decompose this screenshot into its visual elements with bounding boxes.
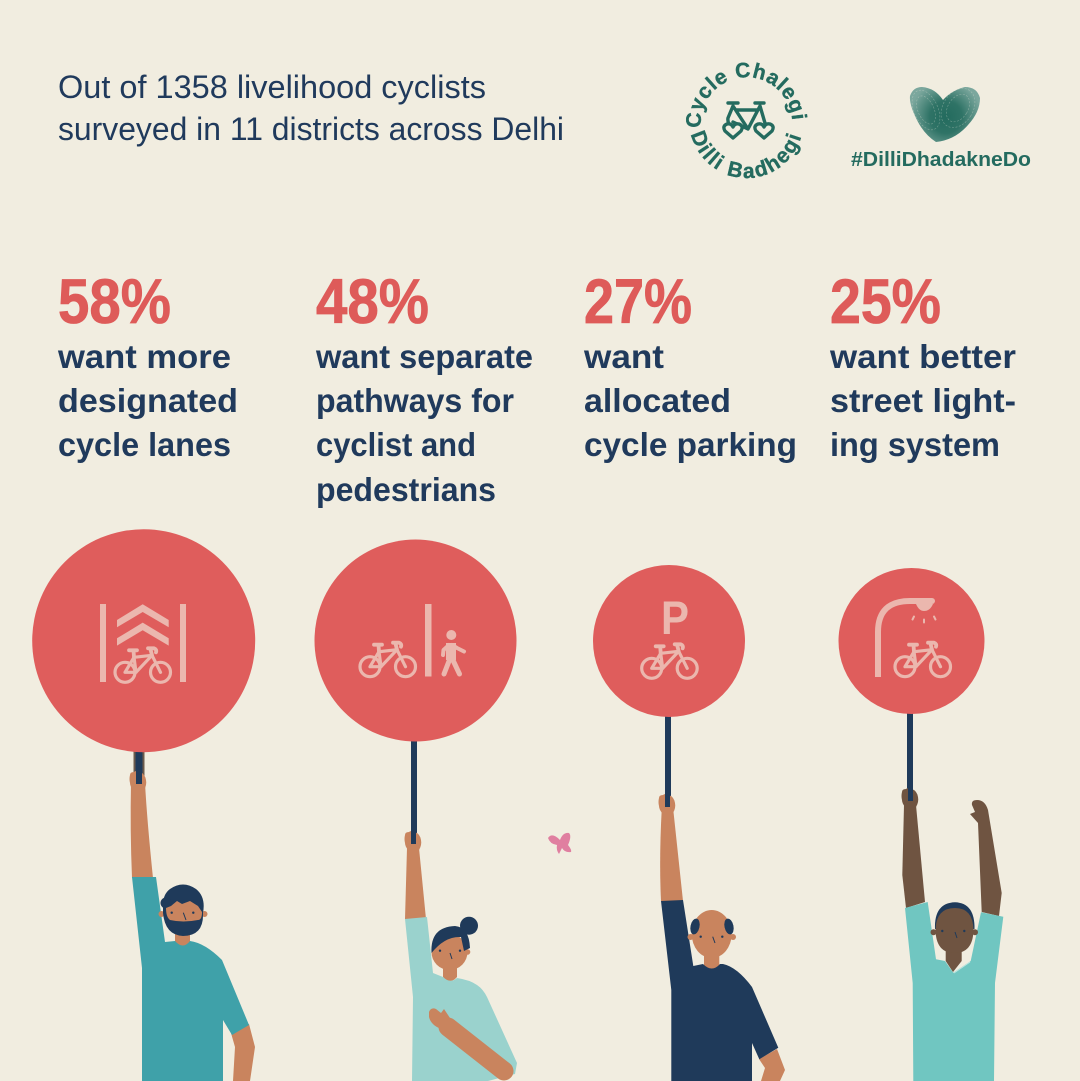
stat: 48% <box>315 267 533 508</box>
stat: 25%: want better <box>829 338 1016 375</box>
person: man with beard <box>130 770 255 1081</box>
lower arm <box>231 1024 255 1081</box>
person: bald man <box>658 793 785 1081</box>
icon: cycle lane with chevrons <box>100 604 186 682</box>
raised free arm <box>970 800 1002 916</box>
stat: 58% <box>57 267 238 463</box>
person: woman with bun <box>404 830 517 1081</box>
stat: 27% <box>583 267 797 463</box>
stat: 27%: want <box>583 338 664 375</box>
raised arm <box>405 848 426 919</box>
hair and beard <box>163 884 204 936</box>
heading: survey intro: Out of 1358 livelihood cyclists <box>58 69 486 105</box>
face <box>166 901 202 922</box>
stat: 48%: pathways for <box>316 382 514 419</box>
neck <box>443 965 457 981</box>
stat: 25%: 25% <box>830 267 941 337</box>
stat: 27%: allocated <box>584 382 731 419</box>
lowered arm <box>429 1008 504 1071</box>
hashtag: #DilliDhadakneDo <box>851 149 1031 171</box>
stat: 27%: 27% <box>584 267 692 337</box>
stat: 58%: designated <box>58 382 238 419</box>
head <box>936 908 974 953</box>
shirt <box>405 917 517 1081</box>
raised arm with pole <box>902 805 925 908</box>
hair with bun <box>431 926 470 953</box>
stat: 48%: pedestrians <box>316 471 496 508</box>
neck <box>946 948 962 972</box>
icon: parking P with bicycle <box>642 591 697 678</box>
side hair <box>689 918 701 935</box>
icon: bicycle with heart wheels <box>724 103 773 138</box>
sign: cycle parking <box>593 565 745 807</box>
shirt <box>905 902 1003 1081</box>
logo: Cycle Chalegi Dilli Badhegi: Dilli Badhegi <box>690 130 802 178</box>
shirt <box>661 900 778 1081</box>
logo: Cycle Chalegi Dilli Badhegi <box>686 62 808 178</box>
neck <box>704 950 719 971</box>
sign: cycle lanes <box>32 529 255 784</box>
stat: 25%: ing system <box>830 426 1000 463</box>
butterfly <box>548 833 571 854</box>
shirt <box>132 877 249 1081</box>
heading: survey intro <box>58 69 564 147</box>
head <box>432 934 468 970</box>
raised arm <box>660 810 683 901</box>
icon: cyclist and pedestrian divided <box>360 604 464 677</box>
stat: 27%: cycle parking <box>584 426 797 463</box>
stat: 25% <box>829 267 1016 463</box>
icon: street lamp with bicycle <box>878 598 950 677</box>
ears <box>158 911 164 917</box>
stat: 48%: 48% <box>316 267 429 337</box>
stat: 25%: street light- <box>830 382 1016 419</box>
logo: fingerprint heart <box>906 82 982 142</box>
icon: parking P with bicycle: P <box>661 591 689 644</box>
sign: street lighting <box>838 568 984 802</box>
stat: 58%: 58% <box>58 267 171 337</box>
stat: 58%: want more <box>57 338 231 375</box>
neck <box>175 930 190 947</box>
raised arm <box>131 783 153 878</box>
stat: 58%: cycle lanes <box>58 426 231 463</box>
logo: Cycle Chalegi Dilli Badhegi: Cycle Chalegi <box>686 62 808 127</box>
stat: 48%: want separate <box>315 338 533 375</box>
stat: 48%: cyclist and <box>316 426 476 463</box>
hair <box>935 902 975 929</box>
heading: survey intro: surveyed in 11 districts across Delhi <box>58 111 564 147</box>
head <box>692 910 732 958</box>
sign: separate pathways <box>314 540 516 844</box>
lower arm <box>759 1049 785 1081</box>
person: man with both arms raised <box>902 787 1003 1081</box>
